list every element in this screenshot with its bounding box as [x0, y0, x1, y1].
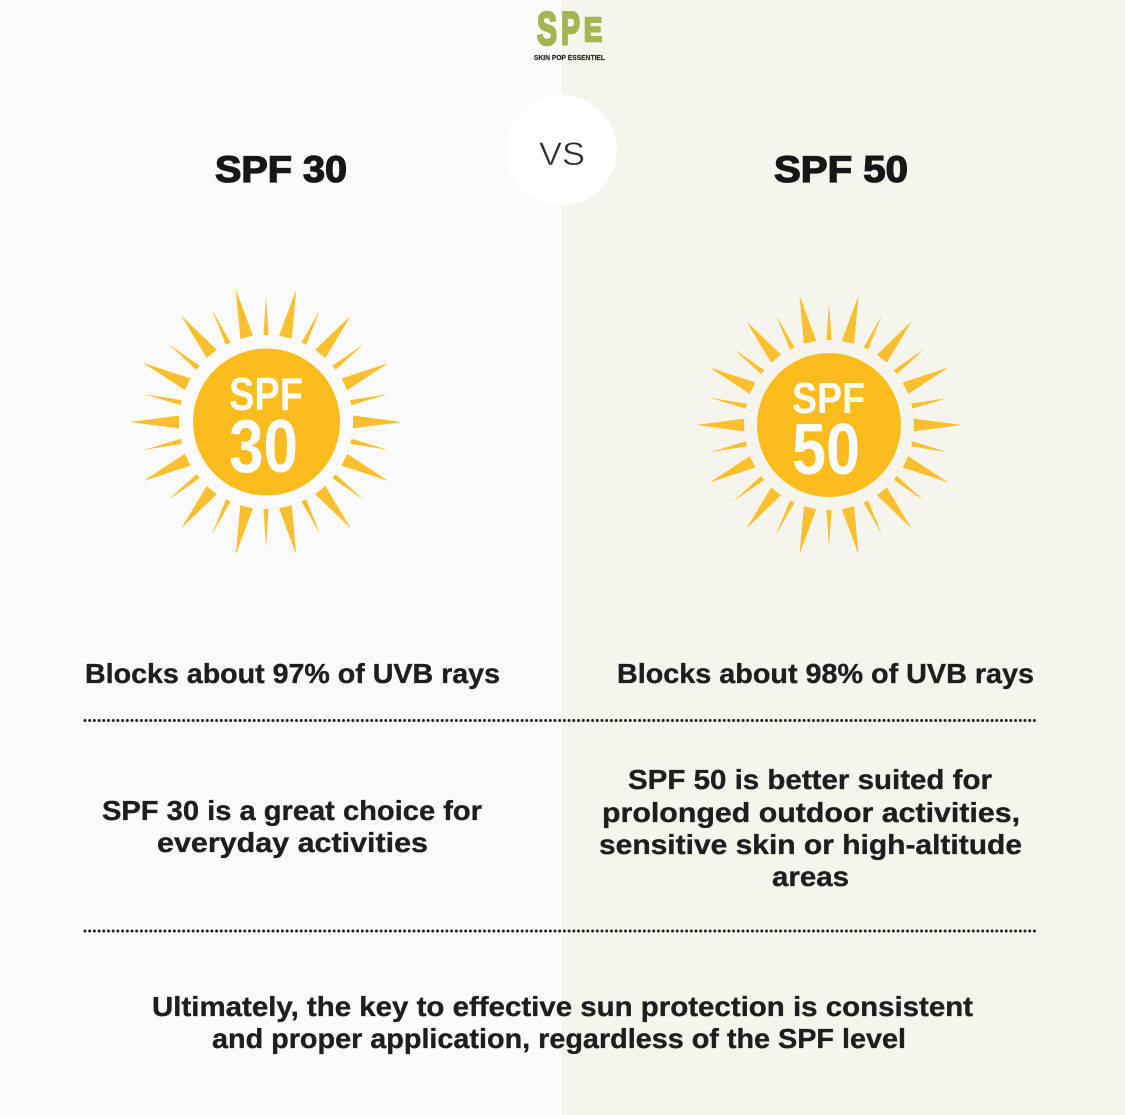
icon: SPF 50 sun: [696, 294, 962, 556]
heading: SPF 30: SPF 30: [215, 149, 347, 190]
sun rays: [130, 288, 402, 556]
text: SPF 50 use case: SPF 50 is better suited for: [628, 764, 992, 795]
logo letters: S: [537, 2, 557, 54]
text: SPF 50 use case: areas: [772, 861, 849, 892]
panel: left background: [0, 0, 562, 1115]
sun label 50: 50: [792, 410, 860, 490]
logo letters: [537, 2, 602, 54]
sun label SPF: SPF: [792, 374, 865, 423]
VS badge: VS: [539, 136, 585, 172]
sun label SPF: SPF: [229, 368, 303, 420]
logo: SPE Skin Pop Essentiel: [534, 2, 605, 62]
text: SPF 30 UVB blocking: Blocks about 97% of UVB rays: [85, 658, 500, 689]
sun rays: [696, 294, 962, 556]
icon: SPF 30 sun: [130, 288, 402, 556]
sun label 30: 30: [229, 404, 298, 488]
heading: SPF 50: SPF 50: [774, 149, 908, 190]
VS badge: [507, 95, 617, 205]
logo letters: P: [561, 2, 580, 54]
text: SPF 50 UVB blocking: Blocks about 98% of UVB rays: [617, 658, 1034, 689]
text: conclusion: and proper application, regardless of the SPF level: [212, 1023, 906, 1054]
text: SPF 50 use case: [599, 764, 1022, 892]
text: SPF 50 use case: prolonged outdoor activities,: [602, 797, 1020, 828]
sun disc: [193, 348, 340, 496]
sun disc: [757, 353, 901, 497]
logo letters: E: [584, 11, 602, 48]
text: conclusion: [152, 991, 973, 1054]
text: SPF 50 use case: sensitive skin or high-altitude: [599, 829, 1022, 860]
logo tagline: SKIN POP ESSENTIEL: [534, 53, 605, 62]
text: SPF 30 use case: everyday activities: [157, 827, 428, 858]
panel: right background: [562, 0, 1125, 1115]
text: SPF 30 use case: SPF 30 is a great choice for: [102, 795, 482, 826]
text: SPF 30 use case: [102, 795, 482, 858]
text: conclusion: Ultimately, the key to effective sun protection is consistent: [152, 991, 973, 1022]
